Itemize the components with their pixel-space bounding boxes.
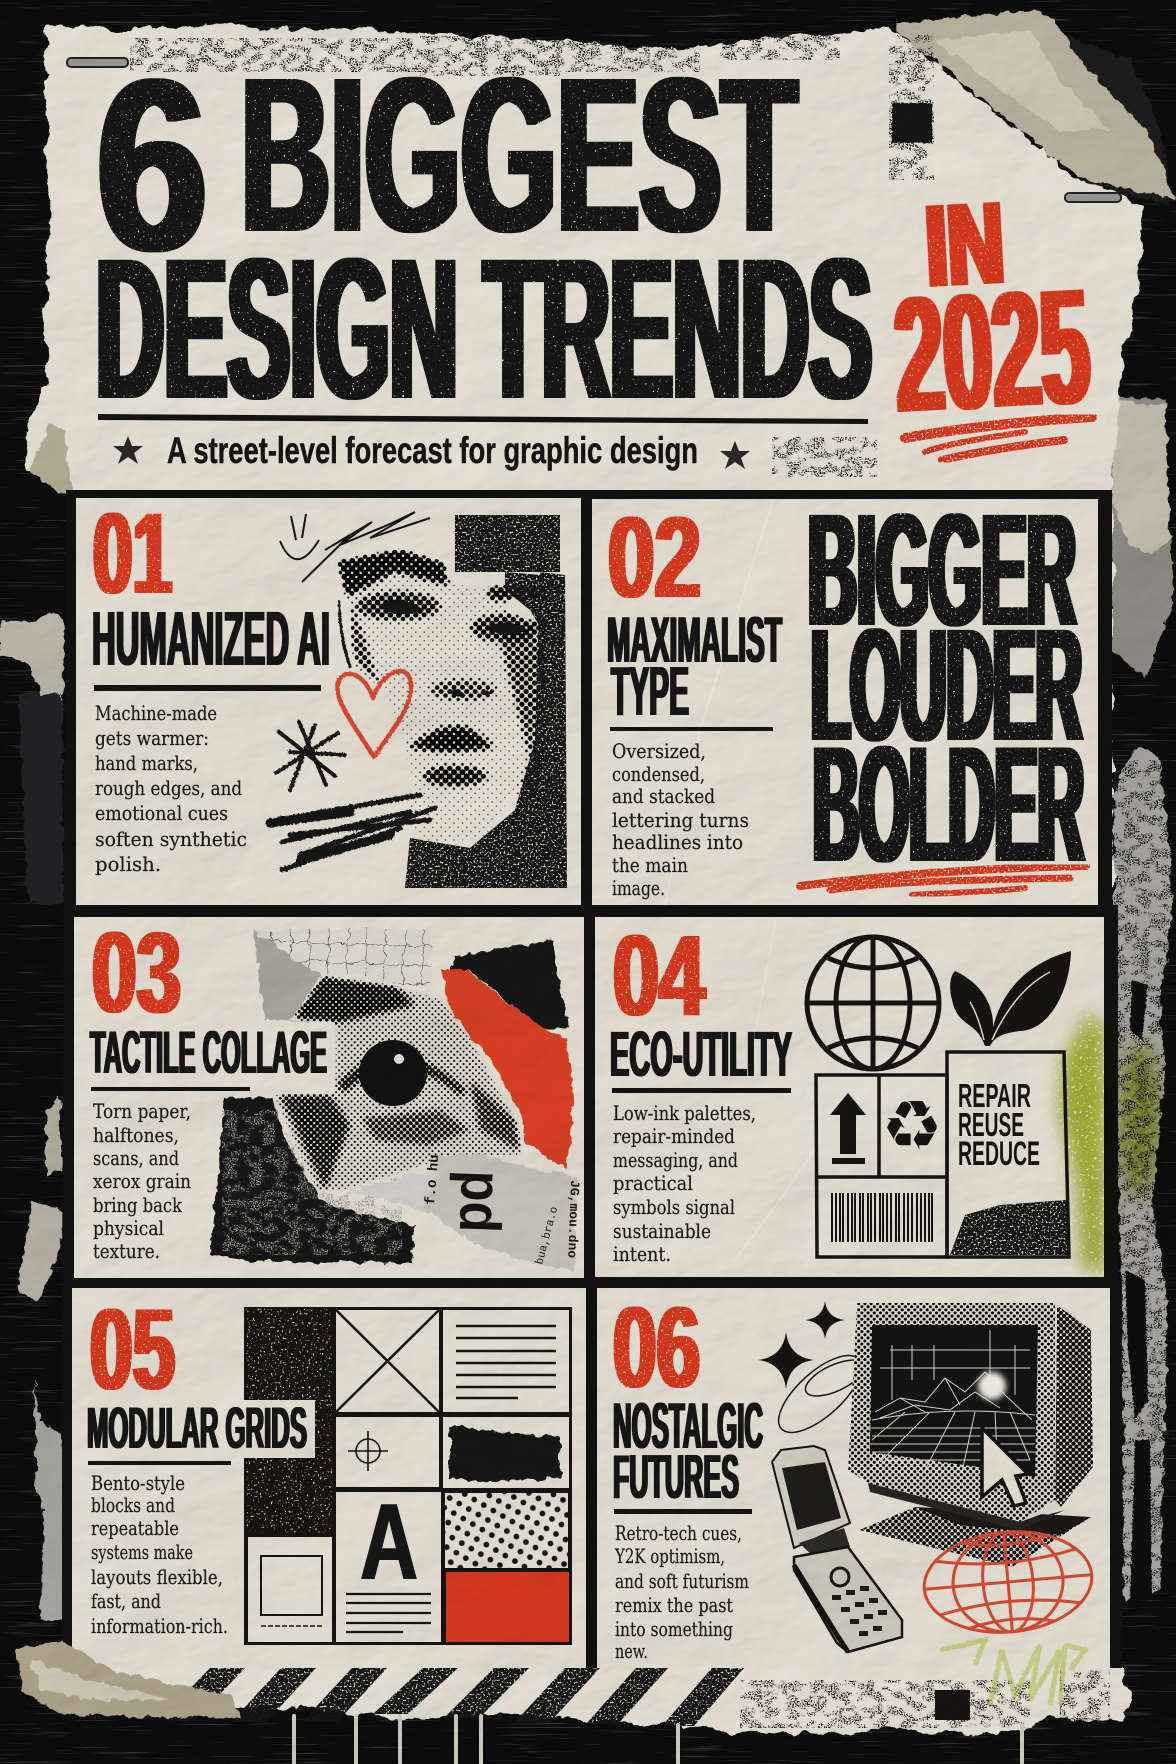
- body text: [613, 1101, 756, 1266]
- icon: red heart: [337, 671, 411, 757]
- hand-drawn zigzag: [302, 512, 430, 582]
- body text: Oversized,: [612, 739, 706, 763]
- flip phone: [772, 1446, 902, 1652]
- body text: information-rich.: [91, 1614, 228, 1638]
- header rule: [98, 414, 868, 424]
- black hair and torn block: [405, 515, 567, 888]
- icon: sparkle large: [758, 1332, 814, 1389]
- solid ink block at foot: [935, 1690, 970, 1720]
- folded paper flap bottom-left: [17, 1640, 240, 1718]
- red wire globe: [920, 1525, 1096, 1639]
- panel: 04 eco-utility: [595, 912, 1104, 1277]
- halftone face: [336, 548, 550, 850]
- scrap with grid: [350, 1168, 440, 1215]
- eye iris: [359, 1040, 427, 1106]
- bento grid: [244, 1307, 572, 1645]
- grid: dashed line: [261, 1625, 322, 1627]
- icon: sparkle small: [805, 1301, 845, 1339]
- body text: messaging, and: [613, 1148, 738, 1172]
- torn type scrap: bua,bra.o: [534, 1206, 561, 1266]
- body text: physical: [93, 1216, 164, 1240]
- body text: Machine-made: [95, 701, 217, 725]
- number 04: 04: [613, 912, 705, 1040]
- screen glow: [978, 1372, 1006, 1400]
- black ink block near corner: [892, 103, 932, 143]
- body text: [93, 1099, 191, 1263]
- collage: halftone eye: [270, 973, 525, 1193]
- body text: Torn paper,: [93, 1099, 191, 1123]
- body text: Retro-tech cues,: [615, 1521, 742, 1545]
- panel: 06 nostalgic futures: NOSTALGIC: [613, 1389, 763, 1462]
- body text: hand marks,: [95, 751, 198, 775]
- body text: polish.: [95, 852, 161, 876]
- body text: texture.: [93, 1239, 160, 1263]
- body text: xerox grain: [93, 1169, 191, 1193]
- body text: [614, 1521, 749, 1663]
- panel: 06 nostalgic futures: [597, 1284, 1110, 1668]
- body text: repeatable: [91, 1516, 179, 1540]
- body text: and stacked: [612, 784, 715, 808]
- rule: [94, 685, 321, 691]
- panel: 01 humanized AI: HUMANIZED AI: [92, 596, 330, 682]
- heading: [613, 1389, 763, 1512]
- body text: Y2K optimism,: [614, 1544, 725, 1568]
- left wall scraps: [0, 612, 66, 1620]
- heading: FUTURES: [613, 1443, 739, 1512]
- icon: recycle: ♻: [882, 1087, 942, 1166]
- title accent: in 2025: IN: [922, 177, 1007, 313]
- body text: Low-ink palettes,: [613, 1101, 756, 1125]
- icon: star left: [113, 436, 143, 464]
- grid: speckles in black column: [246, 1308, 332, 1533]
- panel: 02 maximalist type: MAXIMALIST: [607, 603, 782, 676]
- grid: text lines: [456, 1326, 556, 1398]
- collage: grey mottling: [222, 1110, 402, 1255]
- heading backing and heading: [72, 1396, 315, 1470]
- barcode: [832, 1193, 932, 1242]
- body text: symbols signal: [613, 1195, 735, 1219]
- body text: halftones,: [93, 1123, 179, 1147]
- body text: blocks and: [91, 1493, 175, 1517]
- staple: right: [1065, 193, 1121, 202]
- icon: target: [348, 1431, 388, 1471]
- body text: practical: [613, 1171, 693, 1195]
- stacked words: [808, 480, 1084, 896]
- panel: 05 modular grids: MODULAR GRIDS: [87, 1396, 307, 1461]
- package boxes: [816, 1052, 1069, 1257]
- body text: lettering turns: [612, 808, 749, 832]
- screen wireframe: [870, 1330, 1035, 1475]
- title: 6: [96, 28, 208, 303]
- grid frame: [62, 490, 1122, 1668]
- rule: [614, 1509, 752, 1514]
- title accent: in 2025: [890, 177, 1094, 447]
- icon: hand-drawn smile: [280, 514, 319, 559]
- collage: black torn pieces: [210, 940, 568, 1263]
- subtitle: A street-level forecast for graphic design: [167, 430, 698, 471]
- body text: remix the past: [615, 1593, 733, 1617]
- green graffiti tag: [940, 1640, 1085, 1705]
- paper crease: [665, 500, 773, 905]
- orbit rings: [767, 1343, 873, 1445]
- staple: left: [67, 58, 128, 67]
- panel: 03 tactile collage: [74, 909, 584, 1278]
- body text: rough edges, and: [95, 776, 242, 800]
- crt monitor: [848, 1303, 1093, 1530]
- body text: [612, 739, 749, 900]
- paper crease: [735, 918, 814, 1260]
- body text: gets warmer:: [95, 726, 209, 750]
- red brush underline: [905, 417, 1092, 460]
- rule: [610, 727, 773, 731]
- body text: scans, and: [93, 1146, 179, 1170]
- number 06: 06: [613, 1284, 700, 1412]
- red torn paper: [441, 970, 574, 1170]
- body text: headlines into: [612, 830, 743, 854]
- torn type scrap: [423, 1153, 582, 1270]
- panel: 04 eco-utility: ECO-UTILITY: [610, 1018, 792, 1090]
- grid: letter A: A: [360, 1481, 418, 1603]
- body text: sustainable: [613, 1219, 711, 1243]
- body text: and soft futurism: [615, 1569, 749, 1593]
- pixel cursor: [982, 1428, 1028, 1506]
- ink smudge in box: [950, 1200, 1068, 1255]
- icon: asterisk scribble: [276, 722, 345, 790]
- title: [96, 28, 872, 441]
- body text: intent.: [613, 1242, 671, 1266]
- rule: [88, 1461, 231, 1465]
- rule: [91, 1087, 250, 1091]
- number 01: 01: [93, 490, 172, 618]
- body text: systems make: [91, 1540, 193, 1564]
- icon: leaves: [950, 951, 1071, 1046]
- body text: fast, and: [91, 1589, 161, 1613]
- red brush underline: [800, 866, 1086, 895]
- paper corner flap: left: [28, 425, 72, 497]
- paper corner flap: top right: [896, 10, 1176, 205]
- number 02: 02: [608, 494, 701, 622]
- body text: image.: [612, 876, 665, 900]
- body text: emotional cues: [95, 801, 228, 825]
- panel: 01 humanized AI: [76, 490, 581, 905]
- grid: inner square: [261, 1556, 322, 1615]
- body text: [91, 1471, 228, 1638]
- body text: the main: [612, 853, 688, 877]
- computer base: [859, 1507, 1091, 1567]
- number 05: 05: [90, 1286, 175, 1414]
- panel: 03 tactile collage: TACTILE COLLAGE: [90, 1019, 327, 1086]
- right wall grime: [1114, 760, 1174, 1600]
- rule: [612, 1088, 791, 1093]
- panel: 05 modular grids: [72, 1286, 586, 1668]
- grid: placeholder X: [336, 1310, 439, 1412]
- heading: [607, 603, 782, 730]
- face: solid ink features: [338, 600, 528, 696]
- green spray paint: [1058, 1012, 1160, 1270]
- torn type scrap: pd: [447, 1170, 514, 1234]
- panel: 02 maximalist type: [592, 480, 1098, 905]
- heading backing and heading: [74, 1019, 334, 1090]
- body text: bring back: [93, 1193, 183, 1217]
- grid: caption lines: [346, 1594, 431, 1632]
- icon: this side up arrow: [830, 1093, 866, 1164]
- crt screen: [870, 1325, 1038, 1477]
- grime marks at top of poster: [130, 35, 934, 477]
- repair reuse reduce label: [958, 1077, 1040, 1173]
- body text: soften synthetic: [95, 827, 247, 851]
- repair reuse reduce label: REDUCE: [958, 1135, 1040, 1173]
- icon: globe: [807, 937, 939, 1069]
- worn grey ink at foot of poster: [740, 1670, 1110, 1728]
- repair reuse reduce label: REPAIR: [958, 1077, 1031, 1114]
- repair reuse reduce label: REUSE: [958, 1106, 1024, 1143]
- body text: repair-minded: [613, 1124, 735, 1148]
- grid: black smear: [450, 1425, 560, 1482]
- body text: layouts flexible,: [91, 1565, 223, 1589]
- torn type scrap: JG,mou.dno: [564, 1180, 582, 1259]
- body text: Bento-style: [91, 1471, 185, 1495]
- body text: into something: [615, 1617, 733, 1641]
- heading: TYPE: [611, 652, 689, 730]
- number 03: 03: [92, 909, 181, 1037]
- body text: condensed,: [612, 762, 705, 786]
- paint drips: [294, 1716, 1022, 1764]
- collage: grid paper and grey scrap: [253, 928, 432, 1022]
- body text: new.: [615, 1639, 648, 1663]
- right wall scraps: [1110, 395, 1173, 1600]
- torn type scrap: f.o hu: [423, 1154, 443, 1205]
- body text: [95, 701, 247, 876]
- black scribble strokes: [270, 795, 435, 870]
- hazard stripes at foot of poster: [160, 1668, 744, 1726]
